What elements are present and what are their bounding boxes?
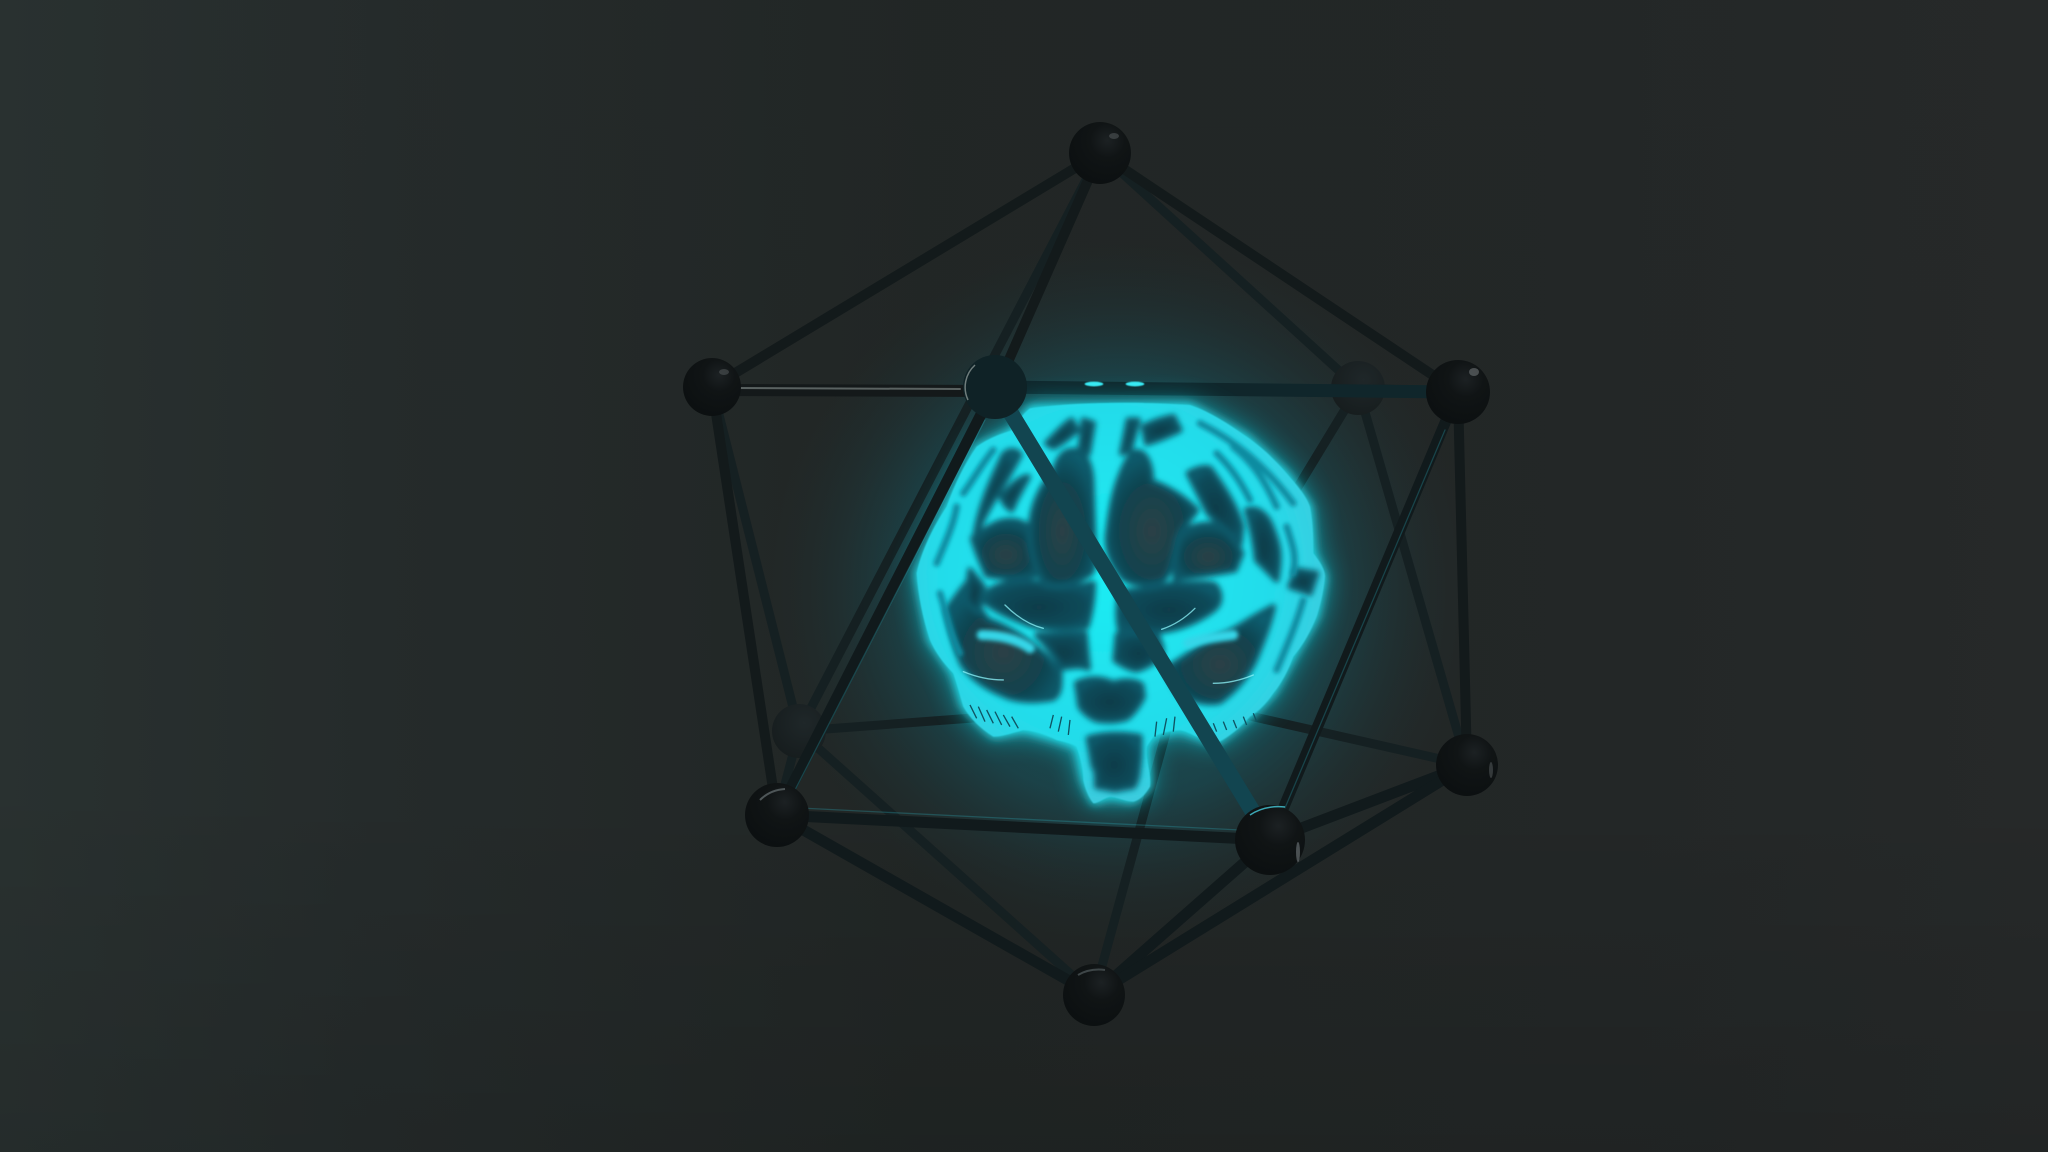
front struts of the icosahedron [712,153,1467,995]
sulcus: top left [1047,420,1077,447]
lobe: left temporal [947,581,1060,700]
brain outer glow [917,405,1325,803]
strut: left rail with highlight [712,388,995,391]
sulcus: upper left outer [975,451,1020,537]
sulcus: right fold upper [1188,468,1242,543]
node: top [1069,122,1131,184]
lobe: left medial [1030,450,1094,585]
sulcus: right fold outer [1247,509,1279,580]
lobe: pons [1077,679,1143,721]
cerebellum hatch left [970,705,1070,735]
bright temporal bands [982,635,1233,648]
cerebellum hatch right [1155,713,1257,737]
back struts of the icosahedron [712,153,1467,995]
lobe: left centre temporal [1037,633,1088,668]
lobe: right temporal [1167,607,1273,703]
teal light halo around the brain [770,240,1470,940]
bright rims [963,605,1253,683]
node: lower left [745,783,809,847]
lobe: right centre temporal [1115,633,1162,670]
node: right [1426,360,1490,424]
brain silhouette [917,403,1325,803]
sulcus: upper left fold [1002,477,1028,510]
front nodes [683,122,1498,1026]
node: upper front left [963,355,1027,419]
lobe: left lateral [973,520,1039,577]
brain tight glow [917,405,1325,803]
brain [917,382,1325,803]
node: lower right [1436,734,1498,796]
node: lower front [1235,805,1305,875]
sulcus: top centre right [1122,420,1138,453]
dark lobes [947,417,1317,790]
back nodes [772,361,1385,758]
struts: front lower frame [777,387,1467,995]
strut behind the brain: top rail [995,387,1458,392]
strut: diagonal across the brain [995,387,1270,840]
node: left [683,358,741,416]
sulcus: top right [1143,417,1180,443]
lobe: right lateral [1175,524,1242,578]
struts: upper frame [712,153,1467,815]
lobe: right lower frontal [1118,583,1220,632]
lobe: left lower frontal [985,581,1093,628]
node: bottom [1063,964,1125,1026]
sulcus: far right lobe [1290,570,1317,593]
strut rim lights [795,420,1445,830]
sulcus: top centre left [1080,420,1093,453]
lobe: right medial [1107,452,1197,584]
sulcus: left edge [966,570,984,613]
top glints [1085,382,1144,386]
outer fold strips [937,423,1303,670]
lobe: brainstem [1088,734,1140,790]
